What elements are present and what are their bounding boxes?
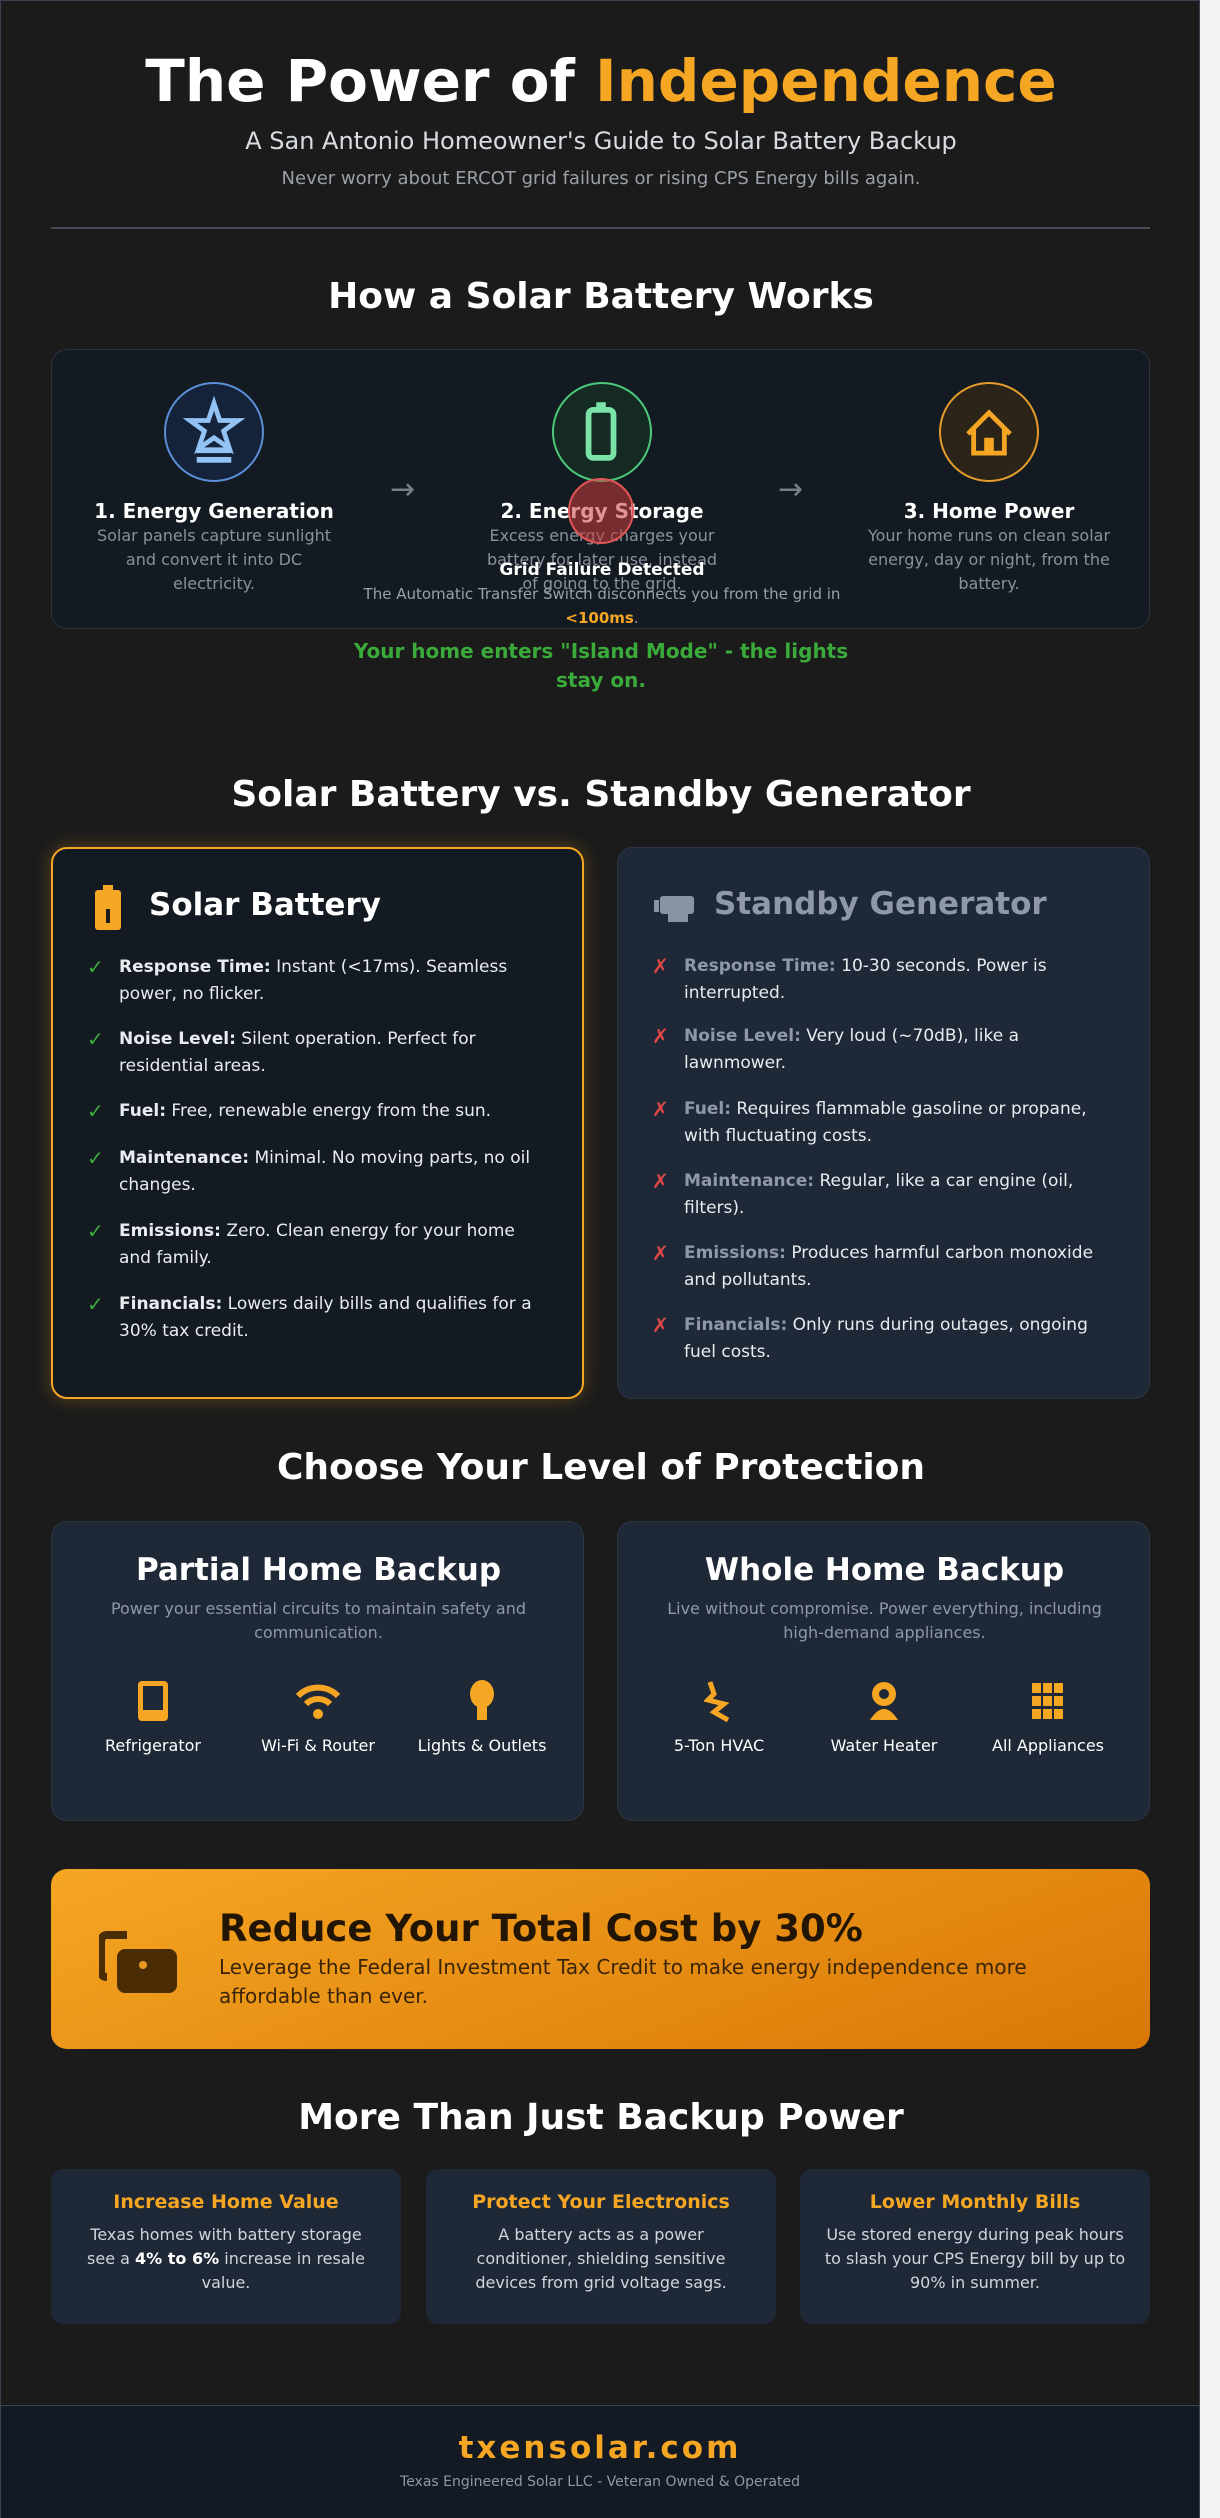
title: The Power of Independence (145, 47, 1057, 115)
banner text: Leverage the Federal Investment Tax Credit to make energy independence more affordable than ever. (219, 1955, 1027, 2008)
icon: hvac (674, 1681, 764, 1755)
benefit: home value (51, 2169, 401, 2324)
panel: standby generator: Response Time: 10-30 seconds. Power is interrupted. (684, 956, 1047, 1003)
panel: solar battery (51, 847, 584, 1399)
panel: solar battery: ✓ (87, 1146, 104, 1170)
step 3: 3. Home Power (904, 499, 1074, 523)
banner title: Reduce Your Total Cost by 30% (219, 1907, 863, 1950)
panel: solar battery: ✓ (87, 1099, 104, 1123)
panel: standby generator: ✗ (652, 954, 669, 978)
heading: how it works: How a Solar Battery Works (328, 276, 874, 317)
footer: Texas Engineered Solar LLC - Veteran Owned & Operated (400, 2474, 800, 2490)
subtitle: A San Antonio Homeowner's Guide to Solar Battery Backup (245, 127, 957, 155)
benefit: electronics: A battery acts as a power conditioner, shielding sensitive devices from grid voltage sags. (475, 2225, 727, 2292)
icon: water heater (831, 1682, 938, 1755)
panel: partial backup: Power your essential circuits to maintain safety and communication. (111, 1599, 526, 1642)
panel: standby generator: Financials: Only runs during outages, ongoing fuel costs. (684, 1315, 1088, 1362)
callout: grid failure: Grid Failure Detected (499, 560, 705, 580)
arrows: → (390, 472, 415, 507)
icon: generator (654, 896, 694, 922)
card heading: Solar Battery (149, 887, 381, 923)
benefit: bills: Use stored energy during peak hours to slash your CPS Energy bill by up to 90% in summer. (825, 2225, 1125, 2292)
panel: solar battery: Financials: Lowers daily bills and qualifies for a 30% tax credit. (119, 1294, 532, 1341)
callout: grid failure (363, 560, 840, 627)
icon: water heater: Water Heater (831, 1736, 937, 1755)
benefit: electronics: Protect Your Electronics (472, 2191, 730, 2213)
icon: hvac: 5-Ton HVAC (674, 1736, 764, 1755)
benefit: home value: Increase Home Value (113, 2191, 339, 2213)
icon: grid failure (568, 478, 634, 544)
panel: standby generator (617, 847, 1150, 1399)
icon: battery (552, 382, 652, 482)
benefit: bills: Lower Monthly Bills (870, 2191, 1080, 2213)
panel: whole home backup: Live without compromise. Power everything, including high-demand appliances. (667, 1599, 1102, 1642)
island mode note: Your home enters "Island Mode" - the lights stay on. (354, 639, 848, 692)
panel: solar battery: ✓ (87, 1292, 104, 1316)
panel: standby generator: Emissions: Produces harmful carbon monoxide and pollutants. (684, 1243, 1093, 1290)
icon: bulb (418, 1680, 546, 1755)
panel: solar battery: ✓ (87, 1219, 104, 1243)
step 1 (94, 499, 334, 593)
panel: process (51, 349, 1150, 629)
icon: wallet (99, 1931, 177, 1993)
panel: solar battery: Response Time: Instant (<17ms). Seamless power, no flicker. (119, 957, 507, 1004)
panel: standby generator: ✗ (652, 1097, 669, 1121)
benefit: electronics (426, 2169, 776, 2324)
panel: solar battery: ✓ (87, 955, 104, 979)
panel: whole home backup: Whole Home Backup (705, 1552, 1064, 1588)
step 2: 2. Energy Storage (500, 499, 704, 523)
panel: partial backup (51, 1521, 584, 1821)
icon: battery (95, 885, 121, 930)
benefit: home value: Texas homes with battery storage see a 4% to 6% increase in resale value. (87, 2225, 365, 2292)
panel: solar battery: Noise Level: Silent operation. Perfect for residential areas. (119, 1029, 476, 1076)
panel: standby generator: ✗ (652, 1169, 669, 1193)
heading: comparison: Solar Battery vs. Standby Generator (231, 774, 971, 815)
icon: sun/star generation (164, 382, 264, 482)
banner: tax credit (51, 1869, 1150, 2049)
panel: solar battery: Emissions: Zero. Clean energy for your home and family. (119, 1221, 515, 1268)
step 1: 1. Energy Generation (94, 499, 334, 523)
footer: txensolar.com (459, 2430, 741, 2466)
heading: protection levels: Choose Your Level of Protection (277, 1447, 925, 1488)
icon: refrigerator: Refrigerator (105, 1736, 201, 1755)
step 2: Excess energy charges your battery for later use, instead of going to the grid. (487, 526, 717, 593)
panel: standby generator: Noise Level: Very loud (~70dB), like a lawnmower. (684, 1026, 1019, 1073)
panel: process: → (778, 472, 803, 507)
footer (1, 2405, 1199, 2518)
callout: grid failure: The Automatic Transfer Switch disconnects you from the grid in <100ms. (364, 585, 840, 627)
panel: standby generator: ✗ (652, 1241, 669, 1265)
tagline: Never worry about ERCOT grid failures or rising CPS Energy bills again. (282, 168, 920, 189)
panel: solar battery: ✓ (87, 1027, 104, 1051)
icon: grid apps (992, 1683, 1104, 1755)
step 3: Your home runs on clean solar energy, day or night, from the battery. (868, 526, 1110, 593)
heading: benefits: More Than Just Backup Power (298, 2097, 904, 2138)
icon: grid apps: All Appliances (992, 1736, 1104, 1755)
panel: standby generator: ✗ (652, 1313, 669, 1337)
icon: bulb: Lights & Outlets (418, 1736, 546, 1755)
card heading: Standby Generator (714, 886, 1047, 922)
panel: solar battery: Maintenance: Minimal. No moving parts, no oil changes. (119, 1148, 530, 1195)
panel: solar battery: Fuel: Free, renewable energy from the sun. (119, 1101, 491, 1121)
panel: standby generator: Fuel: Requires flammable gasoline or propane, with fluctuating costs. (684, 1099, 1087, 1146)
icon: wifi: Wi-Fi & Router (261, 1736, 375, 1755)
benefit: bills (800, 2169, 1150, 2324)
icon: refrigerator (105, 1681, 201, 1755)
panel: partial backup: Partial Home Backup (136, 1552, 501, 1588)
icon: home (939, 382, 1039, 482)
icon: wifi (261, 1684, 375, 1755)
step 1: Solar panels capture sunlight and convert it into DC electricity. (97, 526, 331, 593)
panel: whole home backup (617, 1521, 1150, 1821)
panel: standby generator: ✗ (652, 1024, 669, 1048)
panel: standby generator: Maintenance: Regular, like a car engine (oil, filters). (684, 1171, 1073, 1218)
